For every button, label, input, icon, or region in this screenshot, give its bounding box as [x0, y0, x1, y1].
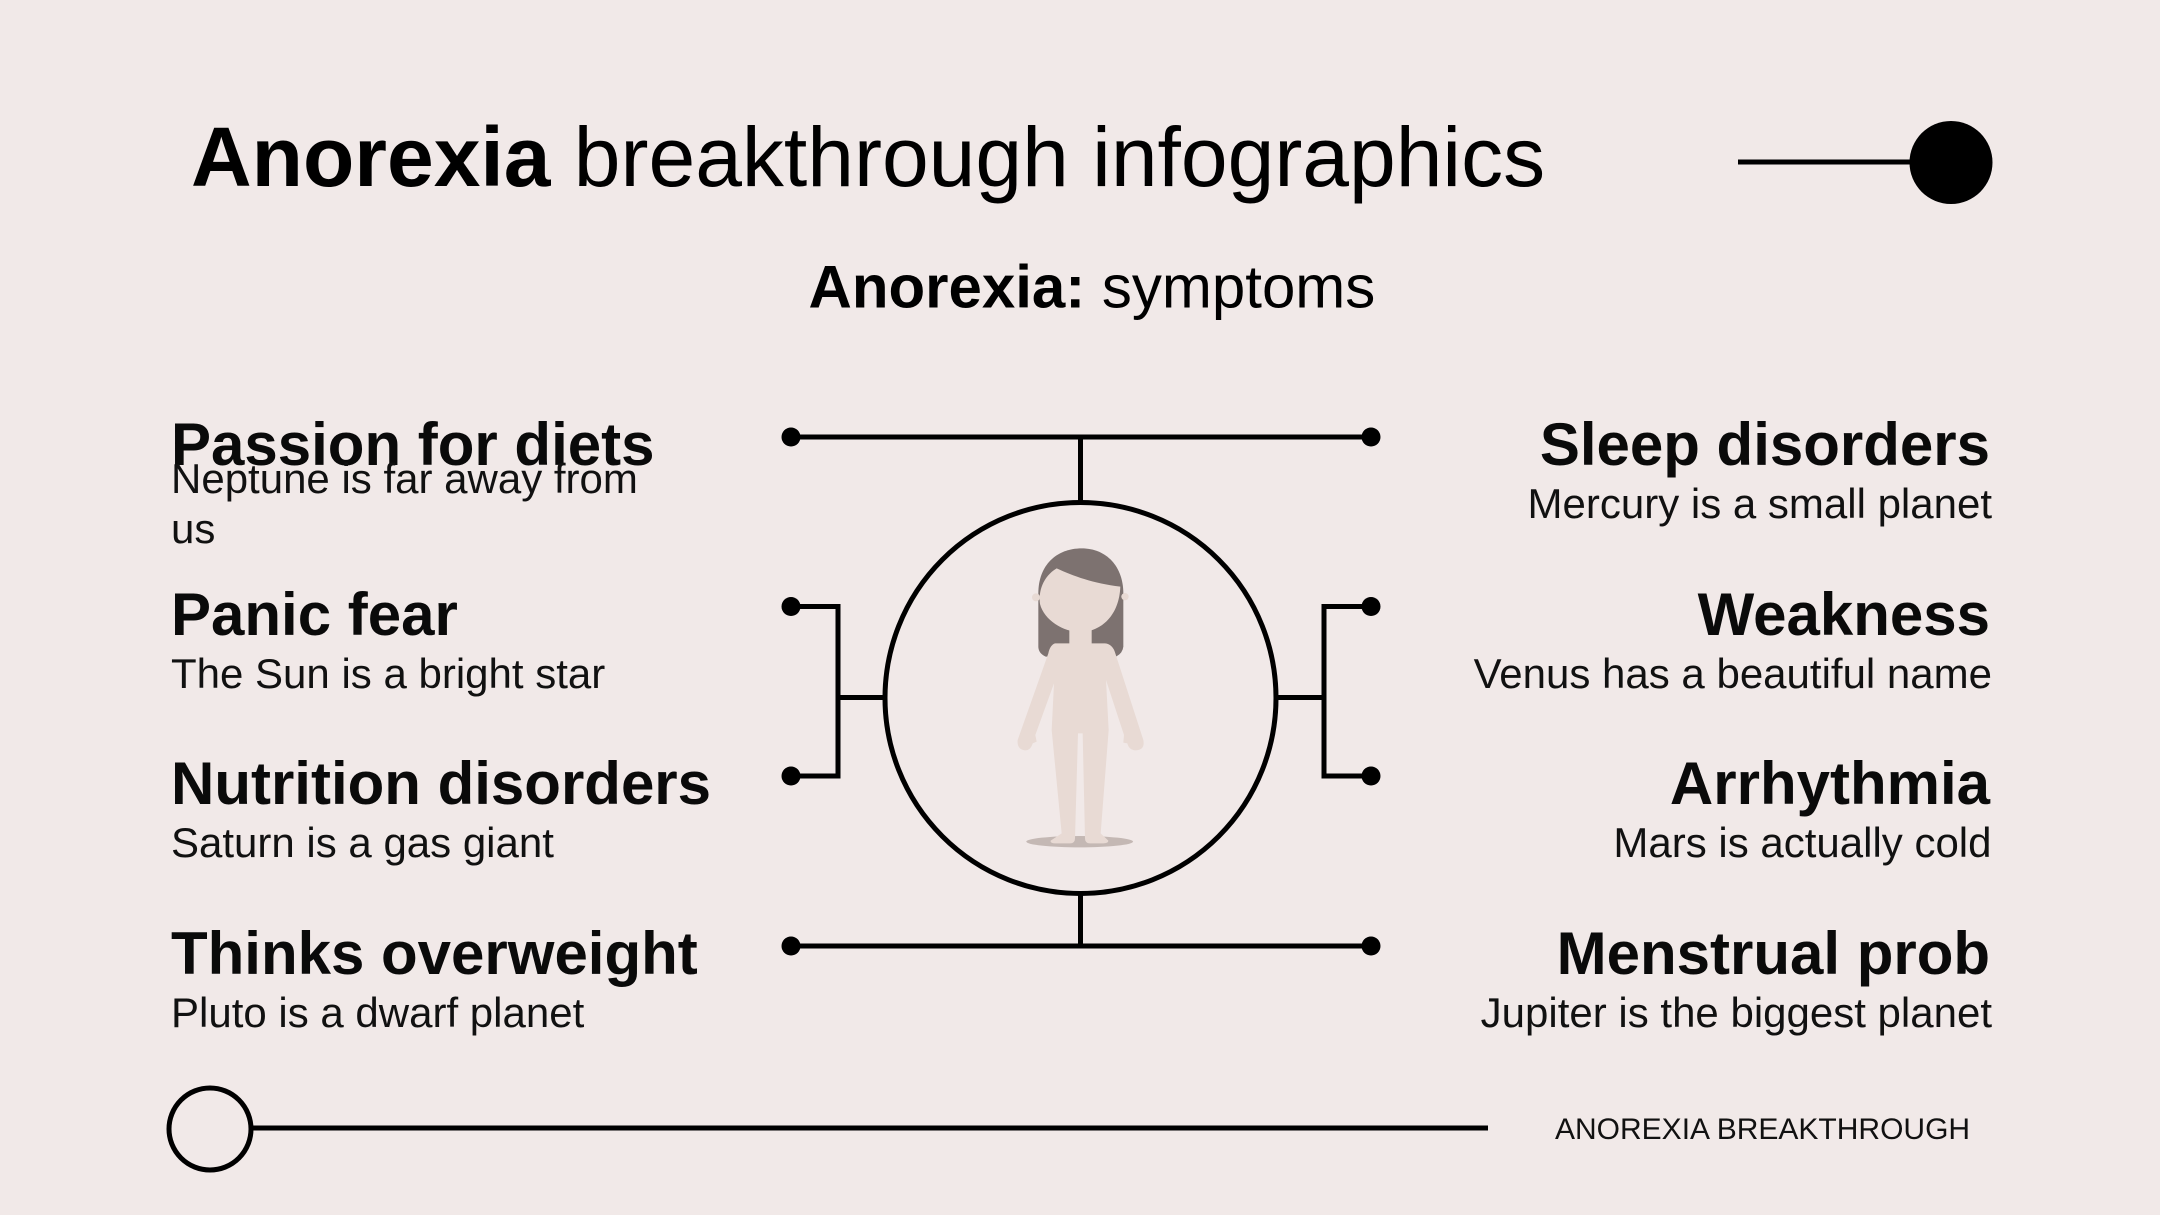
icon: bottom-left outlined circle with line	[169, 1088, 1488, 1170]
hair	[1038, 548, 1123, 657]
symptom: Passion for diets	[171, 411, 654, 552]
symptom: Menstrual prob: Jupiter is the biggest planet	[1481, 989, 1992, 1036]
central circle	[885, 502, 1276, 894]
symptom: Weakness: Venus has a beautiful name	[1474, 650, 1992, 697]
symptom: Nutrition disorders	[171, 750, 711, 866]
symptom: Thinks overweight: Thinks overweight	[171, 920, 698, 987]
symptom: Passion for diets: Neptune is far away from	[171, 455, 638, 502]
symptom: Weakness: Weakness	[1698, 581, 1990, 648]
icon: top-right line with filled circle	[1738, 121, 1992, 204]
symptom: Sleep disorders: Sleep disorders	[1540, 411, 1990, 478]
connector: bottom	[782, 893, 1380, 956]
symptom: Panic fear: Panic fear	[171, 581, 458, 648]
skin	[1018, 568, 1144, 843]
connector: left bracket	[782, 597, 886, 786]
subtitle: Anorexia: symptoms	[808, 254, 1375, 320]
connector: right bracket	[1276, 597, 1380, 786]
symptom: Weakness	[1474, 581, 1992, 697]
connector: top	[782, 428, 1380, 503]
symptom: Nutrition disorders: Saturn is a gas giant	[171, 819, 554, 866]
symptom: Panic fear	[171, 581, 605, 697]
title: Anorexia breakthrough infographics	[191, 110, 1545, 204]
symptom: Thinks overweight	[171, 920, 698, 1036]
symptom: Passion for diets: us	[171, 505, 215, 552]
symptom: Sleep disorders	[1528, 411, 1992, 527]
symptom: Thinks overweight: Pluto is a dwarf planet	[171, 989, 585, 1036]
symptom: Sleep disorders: Mercury is a small planet	[1528, 480, 1992, 527]
symptom: Arrhythmia: Mars is actually cold	[1613, 819, 1992, 866]
symptom: Panic fear: The Sun is a bright star	[171, 650, 605, 697]
footer label: ANOREXIA BREAKTHROUGH	[1555, 1113, 1970, 1146]
shadow	[1026, 836, 1133, 847]
symptom: Arrhythmia: Arrhythmia	[1670, 750, 1991, 817]
symptom: Nutrition disorders: Nutrition disorders	[171, 750, 711, 817]
icon: human figure	[1018, 548, 1144, 847]
symptom: Passion for diets: Passion for diets	[171, 411, 654, 478]
symptom: Menstrual prob	[1481, 920, 1992, 1036]
symptom: Arrhythmia	[1613, 750, 1992, 866]
symptom: Menstrual prob: Menstrual prob	[1557, 920, 1990, 987]
